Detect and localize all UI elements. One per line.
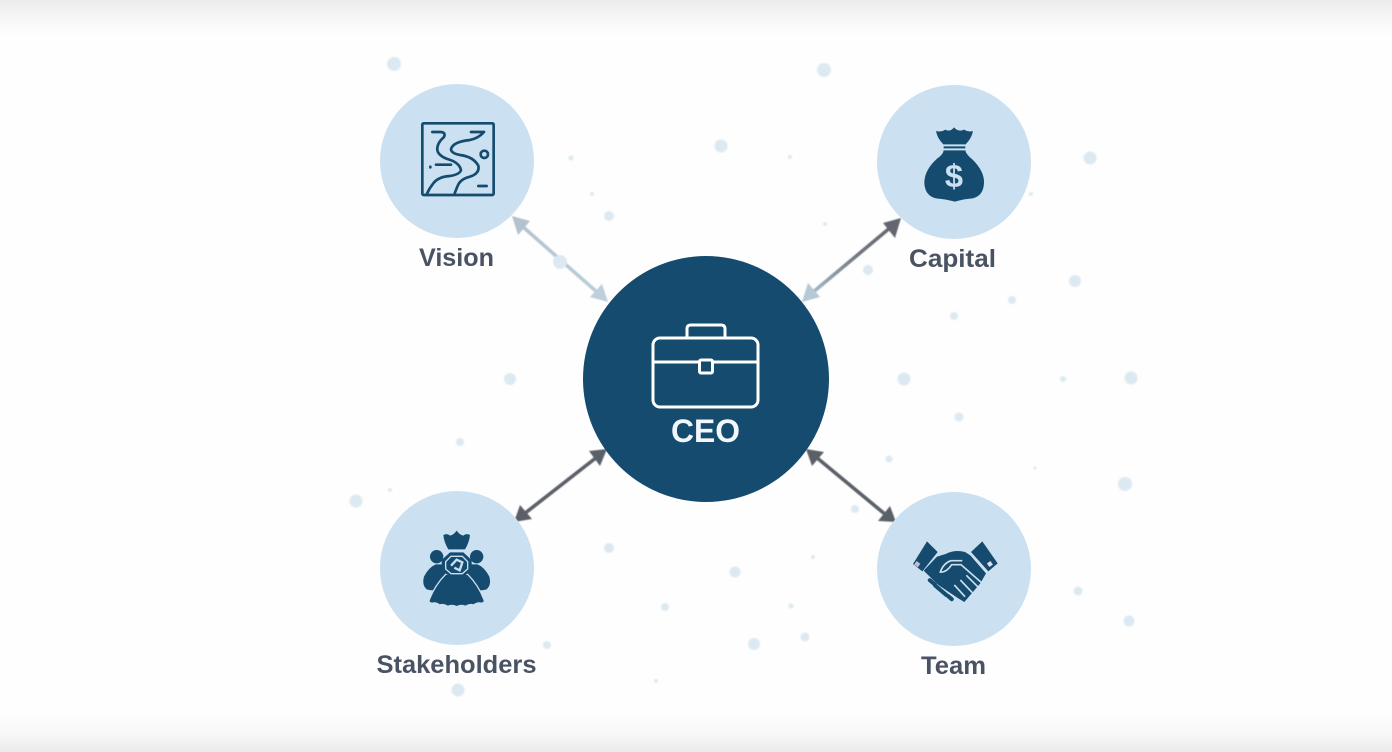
panel: Vision — [380, 84, 534, 272]
icon: stakeholders group — [423, 531, 490, 607]
panel: Stakeholders — [376, 491, 536, 679]
icon: money bag — [924, 127, 984, 202]
arrow: Capital to CEO — [802, 218, 901, 302]
panel: Team — [877, 492, 1031, 680]
arrow: Team to CEO — [806, 449, 896, 522]
icon: map — [422, 123, 494, 195]
scattered background dots — [350, 57, 1138, 696]
arrow: Stakeholders to CEO — [514, 449, 607, 522]
panel: CEO — [583, 256, 829, 502]
label: CEO: CEO — [671, 413, 740, 449]
icon: handshake — [913, 541, 998, 602]
label: Team: Team — [921, 652, 986, 680]
label: Stakeholders: Stakeholders — [376, 651, 536, 679]
arrow: Vision to CEO — [512, 216, 608, 302]
icon: briefcase — [653, 325, 758, 407]
panel: Capital — [877, 85, 1031, 273]
label: Vision: Vision — [419, 244, 494, 272]
icon: money bag: $ — [945, 157, 963, 194]
label: Capital: Capital — [909, 245, 996, 273]
